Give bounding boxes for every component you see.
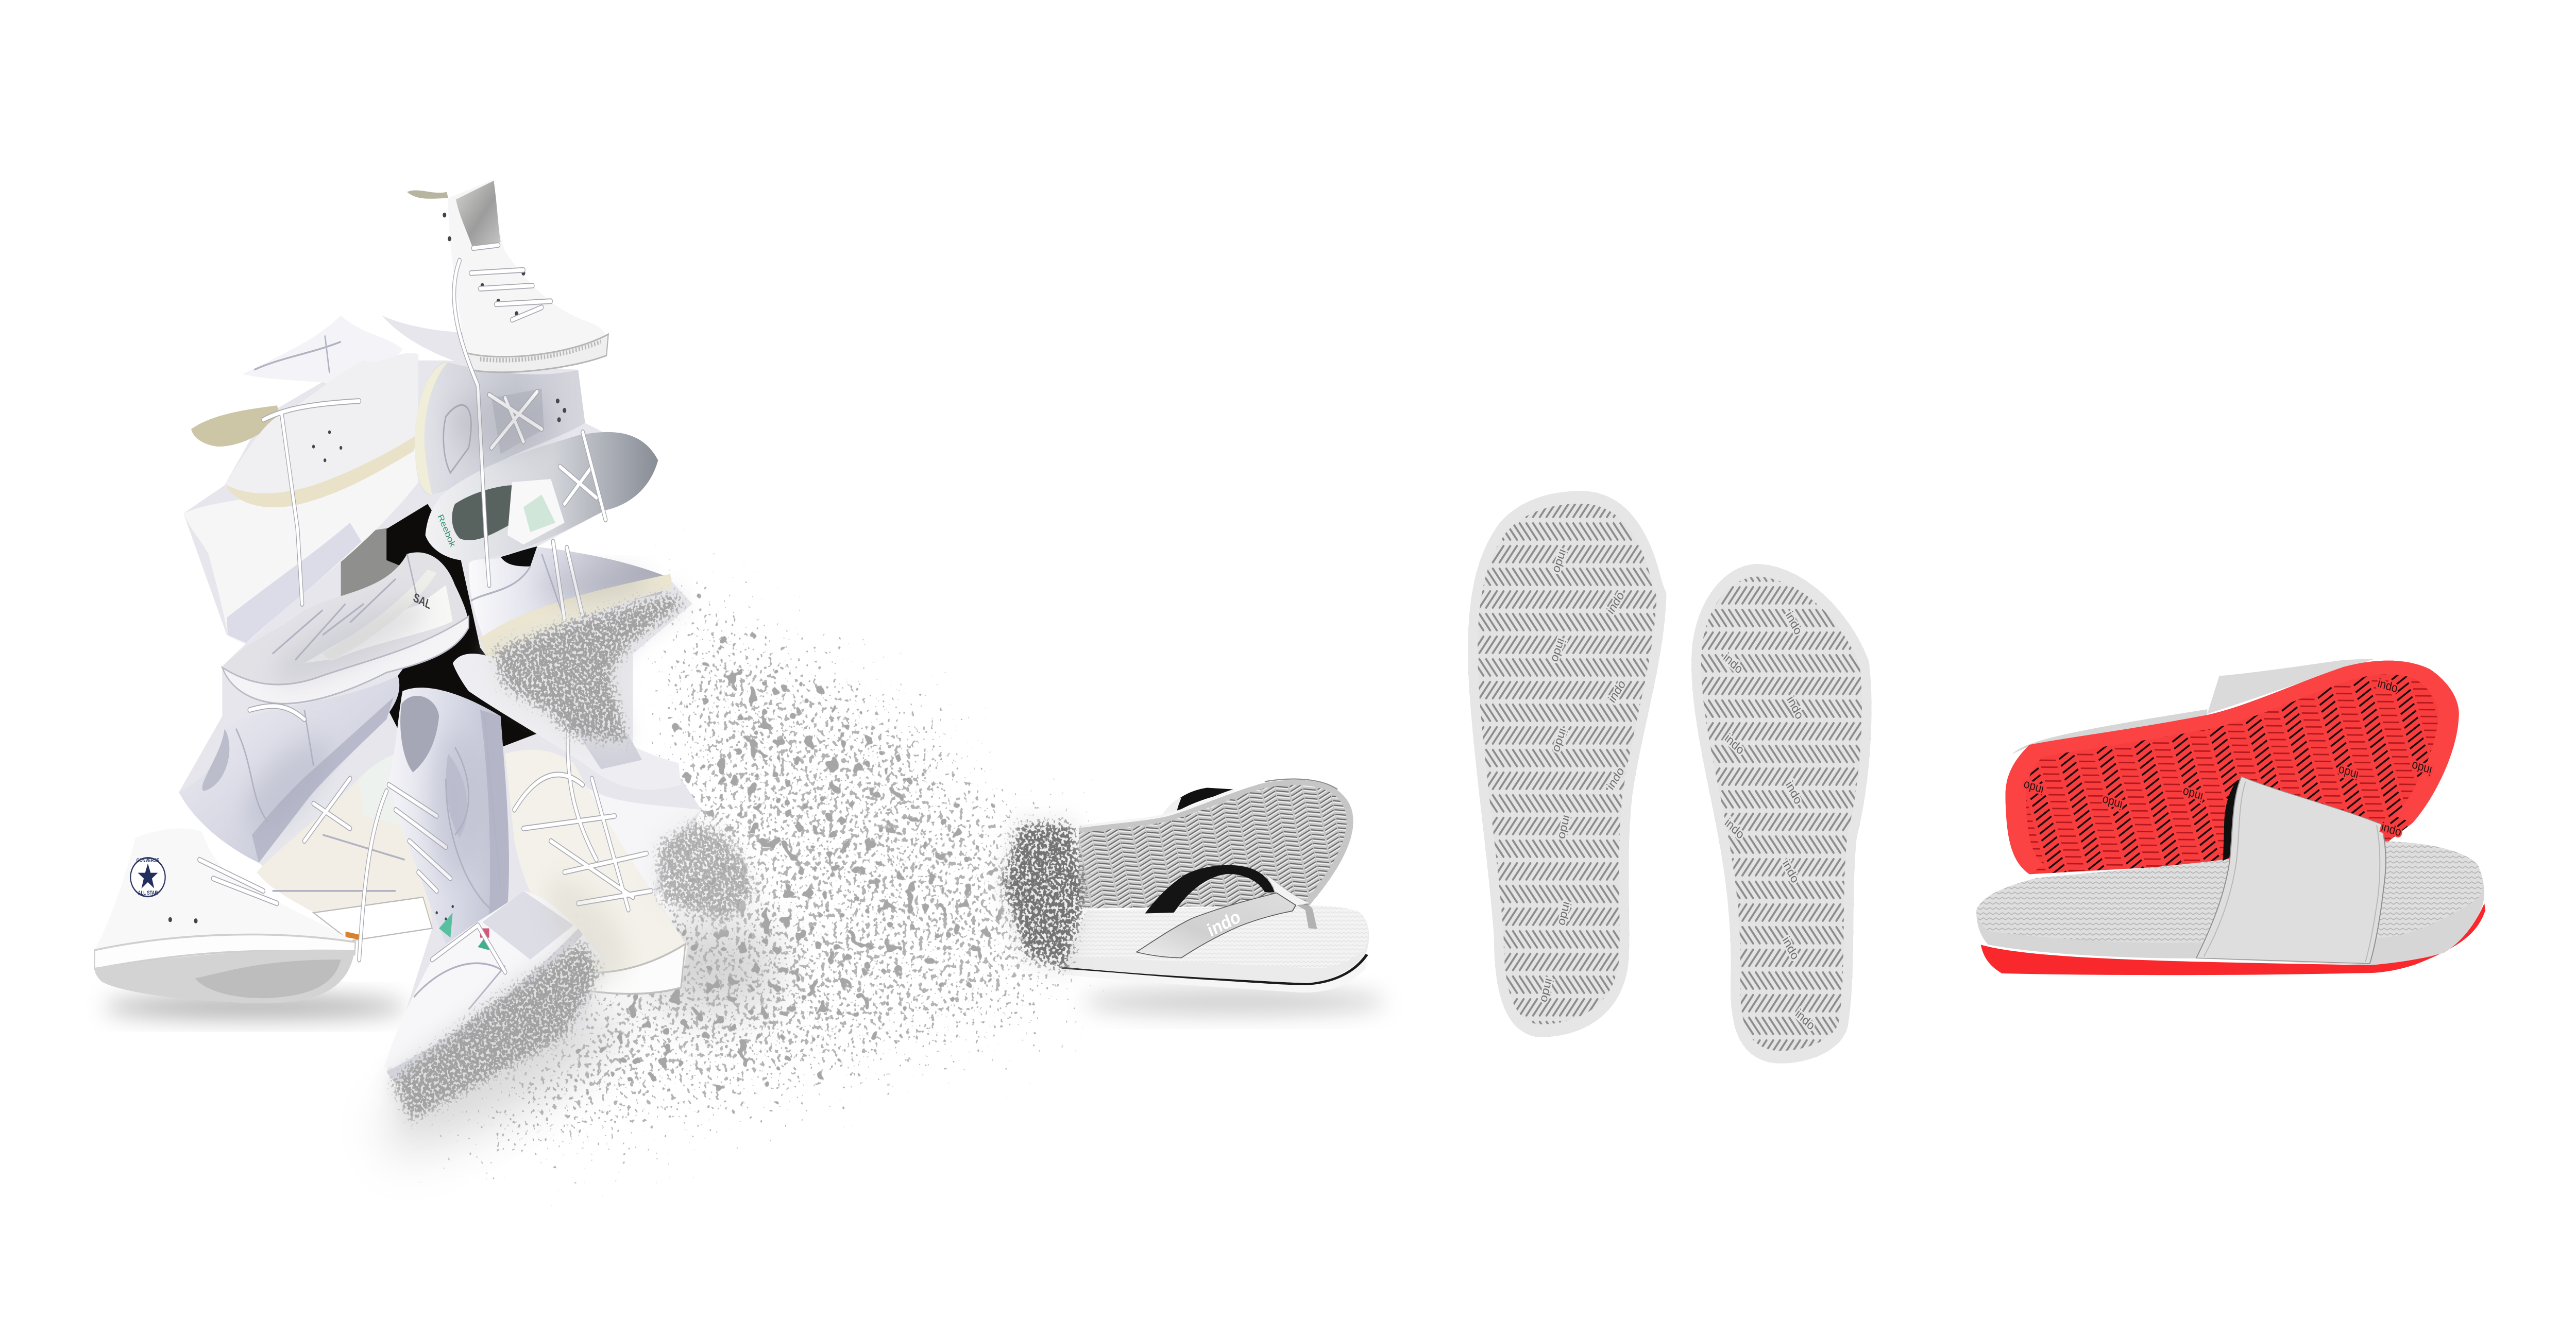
- particle cloud: coarse flakes: [528, 603, 1029, 1128]
- sole logos: right foot: indo: [1783, 609, 1805, 637]
- sole logos: right foot: indo: [1780, 934, 1802, 962]
- dissolve patch: far shoe toe: [653, 816, 760, 928]
- shoe: cream chunky boot with laces: [505, 716, 688, 994]
- slide sole logos: indo: [2380, 819, 2403, 839]
- flip-flop: upturned tread sole: [1079, 779, 1353, 909]
- flip-flop pair: [1062, 779, 1369, 992]
- shoe: Salomon trail runner: [222, 552, 469, 704]
- shoe: Air Force 1 upright: [359, 688, 509, 960]
- slide sole logos: indo: [2181, 785, 2204, 804]
- shoe pile: [94, 179, 701, 1084]
- shoe: Air Force 1 lying: [179, 676, 399, 863]
- slide sole logos: indo: [2377, 676, 2399, 695]
- sole logos: left foot: indo: [1604, 589, 1626, 616]
- slide: wide grey strap: [2196, 777, 2386, 964]
- sole logos: right foot: indo: [1721, 650, 1745, 676]
- shoe: Stan Smith with cream sole: [225, 353, 418, 604]
- dissolve patch: front shoe sole: [386, 935, 605, 1128]
- slide: red outsole edge: [1981, 903, 2485, 975]
- icon: Converse ankle patch: CONVERSE: [137, 858, 159, 864]
- shoe: far right hi-top with dissolving toe: [583, 785, 701, 897]
- sole logos: right foot: [1721, 609, 1817, 1033]
- flip-flop: footbed: [1062, 905, 1369, 983]
- soft leather shading across the pile: [233, 391, 651, 997]
- slide sandal pair with red sole: [1976, 659, 2485, 975]
- sole logos: right foot: indo: [1793, 1006, 1817, 1033]
- sole logos: left foot: indo: [1605, 677, 1628, 705]
- sole logos: left foot: indo: [1549, 637, 1568, 664]
- flip-flop: grey strap: [1137, 893, 1296, 958]
- sole logos: right foot: indo: [1780, 857, 1802, 885]
- sole logos: left foot: indo: [1556, 900, 1573, 928]
- shoe: right leather above the dissolve: [469, 541, 672, 663]
- dissolve patch: upper right shoe: [486, 588, 692, 747]
- flip-flop strap logo: indo: [1205, 906, 1243, 941]
- sole logos: right foot: indo: [1722, 731, 1747, 757]
- slide sole logos: indo: [2410, 759, 2433, 778]
- slide sole logos: indo: [2337, 763, 2360, 783]
- sole logos: left foot: indo: [1538, 977, 1556, 1004]
- shoe: Reebok Club C with dark insole: [426, 432, 658, 561]
- shoe: back low-top: [243, 316, 402, 385]
- slide: back strap behind the sole: [2012, 659, 2375, 754]
- sole: right foot with herringbone tread: [1691, 564, 1872, 1064]
- flip-flop: lower white side wall and black stripe: [1062, 954, 1367, 992]
- dark gaps between shoes: [382, 504, 541, 747]
- scene: shoes dissolving into recycled sandals: [94, 180, 2485, 1206]
- sole logos: left foot: indo: [1604, 764, 1626, 792]
- shoe: Salomon trail runner: SAL: [412, 591, 432, 612]
- flip-flop: toe post: [1297, 904, 1317, 929]
- flip-flop shadow: [1082, 989, 1386, 1014]
- sole logos: right foot: indo: [1785, 693, 1806, 722]
- icon: Converse ankle patch: ALL STAR: [138, 890, 158, 897]
- shoe: Converse All Star high-top: [94, 828, 355, 1003]
- slide sole logos: [2022, 676, 2433, 839]
- slide sole logos: indo: [2022, 778, 2045, 798]
- slide sole logos: indo: [2101, 793, 2124, 813]
- flip-flop: black strap inner arch: [1145, 865, 1310, 913]
- shoe: grey Nike on its side: [415, 362, 585, 494]
- shoe: hi-top on top of the pile: [382, 179, 608, 585]
- pile silhouette: mid-tone fill between the shoes: [179, 361, 701, 1072]
- dissolve patch: particles meeting the flip-flop: [998, 819, 1091, 977]
- shoe: Reebok Club C with dark insole: Reebok: [436, 512, 457, 550]
- sole: left foot with herringbone tread: [1468, 491, 1666, 1037]
- sole logos: left foot: indo: [1551, 727, 1570, 755]
- shoe: lower dissolving runner: [453, 654, 681, 790]
- icon: Converse ankle patch: [130, 858, 165, 897]
- sole logos: right foot: indo: [1722, 815, 1747, 842]
- sole logos: right foot: indo: [1783, 778, 1805, 807]
- sole logos: left foot: [1538, 547, 1628, 1004]
- slide: footbed: [1976, 842, 2484, 965]
- back strap seen behind the sole: [1162, 787, 1234, 815]
- shoe: cream runner behind: [257, 752, 432, 941]
- slide: strap black lining: [2223, 778, 2247, 861]
- soft ground shadows under the shoe pile: [103, 919, 783, 1172]
- shoe: grey inner shoe in the shadow: [341, 523, 432, 604]
- sole logos: left foot: indo: [1556, 814, 1573, 841]
- sole logos: left foot: indo: [1551, 547, 1570, 575]
- particle cloud: fine dust: [438, 582, 1078, 1151]
- slide: red tread sole: [2005, 661, 2459, 874]
- shoe: front Reebok with dissolving sole: [384, 891, 601, 1084]
- shoe: tan sole tip: [191, 405, 282, 447]
- shoe: big white canvas: [183, 448, 418, 644]
